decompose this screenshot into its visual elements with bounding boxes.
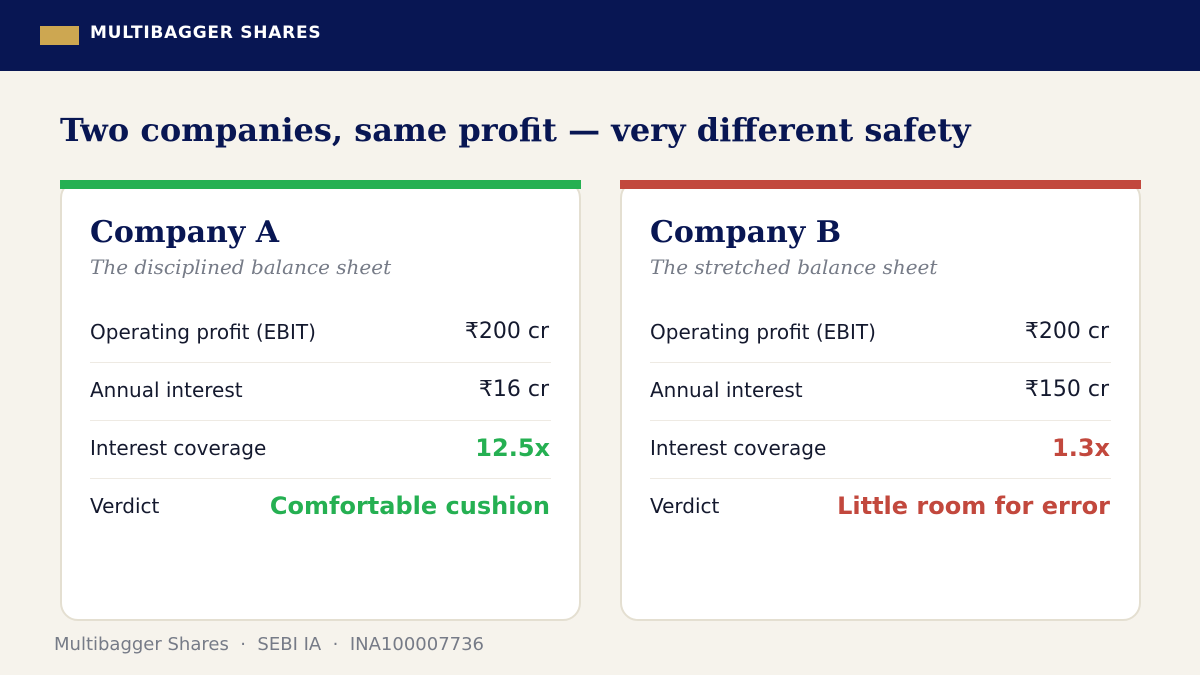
value: annual interest: ₹150 cr <box>1025 377 1109 402</box>
value: verdict: Little room for error <box>837 492 1110 520</box>
label: interest coverage: Interest coverage <box>90 436 266 460</box>
title: Two companies, same profit — very different safety <box>60 111 971 149</box>
card background <box>60 180 581 621</box>
value: annual interest: ₹16 cr <box>479 377 549 402</box>
label: interest coverage: Interest coverage <box>650 436 826 460</box>
footer: Multibagger Shares · SEBI IA · INA100007736 <box>54 634 484 655</box>
label: annual interest: Annual interest <box>650 378 803 402</box>
red accent bar <box>620 180 1141 189</box>
company B subtitle: The stretched balance sheet <box>650 255 937 279</box>
label: verdict: Verdict <box>90 494 159 518</box>
value: interest coverage: 12.5x <box>475 434 550 462</box>
brand name: MULTIBAGGER SHARES <box>90 23 321 43</box>
green accent bar <box>60 180 581 189</box>
label: operating profit: Operating profit (EBIT) <box>650 320 876 344</box>
label: verdict: Verdict <box>650 494 719 518</box>
company A subtitle: The disciplined balance sheet <box>90 255 391 279</box>
company A name: Company A <box>90 215 279 250</box>
label: annual interest: Annual interest <box>90 378 243 402</box>
panel: company A <box>60 180 581 621</box>
logo block <box>40 26 79 45</box>
value: interest coverage: 1.3x <box>1052 434 1110 462</box>
company B name: Company B <box>650 215 841 250</box>
header band <box>0 0 1200 71</box>
card background <box>620 180 1141 621</box>
value: operating profit: ₹200 cr <box>1025 319 1109 344</box>
value: verdict: Comfortable cushion <box>270 492 550 520</box>
value: operating profit: ₹200 cr <box>465 319 549 344</box>
panel: company B <box>620 180 1141 621</box>
label: operating profit: Operating profit (EBIT) <box>90 320 316 344</box>
